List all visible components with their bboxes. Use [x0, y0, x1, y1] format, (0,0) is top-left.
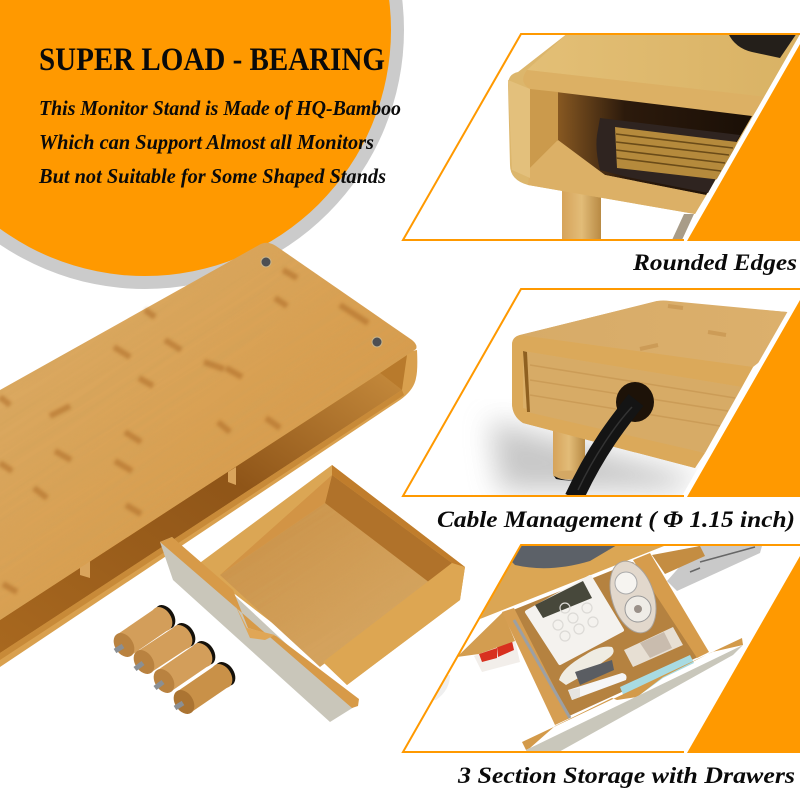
monitor disc	[511, 545, 617, 568]
foot 3	[149, 637, 220, 697]
cable	[574, 400, 636, 498]
grey drawer front	[526, 645, 743, 753]
frame: storage panel	[403, 545, 800, 752]
bamboo feet	[109, 601, 240, 718]
foot 2	[129, 619, 200, 678]
eraser	[624, 627, 683, 667]
drawer	[160, 465, 465, 722]
lower shelf	[457, 612, 515, 657]
frame	[403, 34, 800, 240]
description text	[38, 96, 401, 188]
panel: rounded edges	[403, 33, 800, 242]
timer	[527, 577, 622, 663]
body	[512, 301, 787, 468]
orange corner	[687, 44, 800, 241]
tape	[609, 560, 657, 634]
orange corner	[687, 300, 800, 497]
orange corner	[687, 556, 800, 753]
description text: But not Suitable for Some Shaped Stands	[38, 164, 386, 188]
caption: storage: 3 Section Storage with Drawers	[457, 763, 795, 788]
bolt holes	[261, 257, 382, 347]
caption: cable management: Cable Management ( Φ 1.15 inch)	[437, 507, 795, 532]
title: SUPER LOAD - BEARING	[39, 42, 385, 78]
foot 1	[109, 601, 180, 661]
rear compartment	[652, 546, 705, 574]
description text: This Monitor Stand is Made of HQ-Bamboo	[39, 96, 401, 120]
shadow	[490, 420, 700, 490]
frame	[403, 289, 800, 496]
drawer base	[513, 562, 707, 717]
main bamboo stand	[0, 242, 418, 667]
orange circle badge with grey ring	[0, 0, 404, 289]
panel: cable management	[403, 289, 800, 500]
stapler	[559, 647, 626, 700]
caption: rounded edges: Rounded Edges	[632, 250, 797, 275]
description text: Which can Support Almost all Monitors	[39, 130, 374, 154]
panel: storage with drawers	[434, 546, 800, 753]
top shelf	[480, 545, 664, 619]
monitor foot	[729, 35, 796, 58]
leg	[553, 430, 585, 480]
power strip	[474, 640, 520, 672]
book	[596, 118, 740, 193]
leg	[562, 190, 601, 242]
foot 4	[169, 658, 240, 718]
sticky note	[620, 655, 694, 697]
drawer front lip	[522, 638, 743, 750]
keyboard	[667, 546, 762, 591]
frame	[403, 289, 800, 496]
